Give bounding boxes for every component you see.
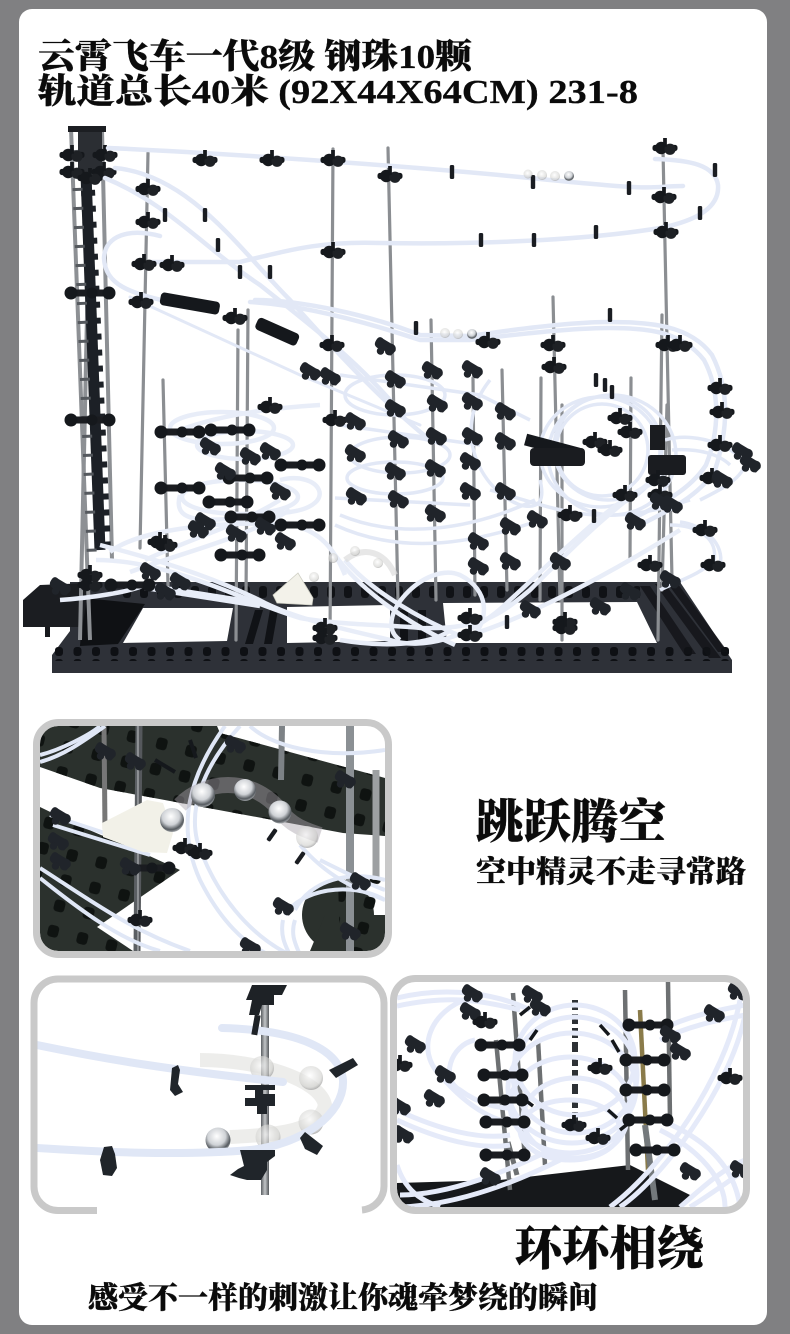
clamps in U-turn panel bbox=[100, 985, 358, 1180]
balls in U-turn panel bbox=[206, 1056, 324, 1152]
left spiral and lower tracks bbox=[60, 405, 680, 645]
panel: jump detail photo bbox=[36, 722, 388, 956]
title bbox=[38, 38, 638, 111]
poles in loop panel bbox=[496, 982, 670, 1200]
title: 轨道总长40米 (92X44X64CM) 231-8 bbox=[38, 72, 638, 111]
clamps in loop panel bbox=[388, 982, 751, 1186]
heading: jump: 跳跃腾空 bbox=[476, 796, 666, 849]
caption: 感受不一样的刺激让你魂牵梦绕的瞬间 bbox=[88, 1281, 598, 1315]
motion trail and balls bbox=[102, 779, 320, 853]
panel: loop detail photo bbox=[388, 978, 751, 1210]
dark clamps along the track bbox=[50, 138, 761, 645]
title: 云霄飞车一代8级 钢珠10颗 bbox=[38, 38, 475, 76]
tubes in U-turn panel bbox=[37, 1028, 343, 1153]
dark base in jump panel bbox=[40, 726, 385, 951]
cone jump and flying balls bbox=[273, 546, 395, 605]
dark base in loop panel bbox=[397, 1165, 690, 1207]
base plate bbox=[23, 582, 732, 673]
loop rings on the right bbox=[490, 395, 745, 590]
heading: loops: 环环相绕 bbox=[515, 1224, 704, 1276]
upper tracks bbox=[104, 148, 725, 525]
tubes in loop panel bbox=[397, 992, 745, 1207]
panel: U-turn detail photo bbox=[34, 979, 384, 1210]
main product photo: marble roller coaster bbox=[23, 126, 761, 673]
tubes in jump panel bbox=[40, 726, 385, 955]
support poles bbox=[140, 148, 672, 640]
lift tower bbox=[60, 126, 118, 640]
middle spirals bbox=[335, 375, 542, 544]
poles in jump panel bbox=[104, 726, 376, 951]
subheading: jump: 空中精灵不走寻常路 bbox=[476, 855, 746, 889]
small steel ball groups bbox=[440, 170, 574, 339]
pole in U-turn panel bbox=[261, 985, 269, 1195]
clamps in jump panel bbox=[48, 735, 371, 956]
